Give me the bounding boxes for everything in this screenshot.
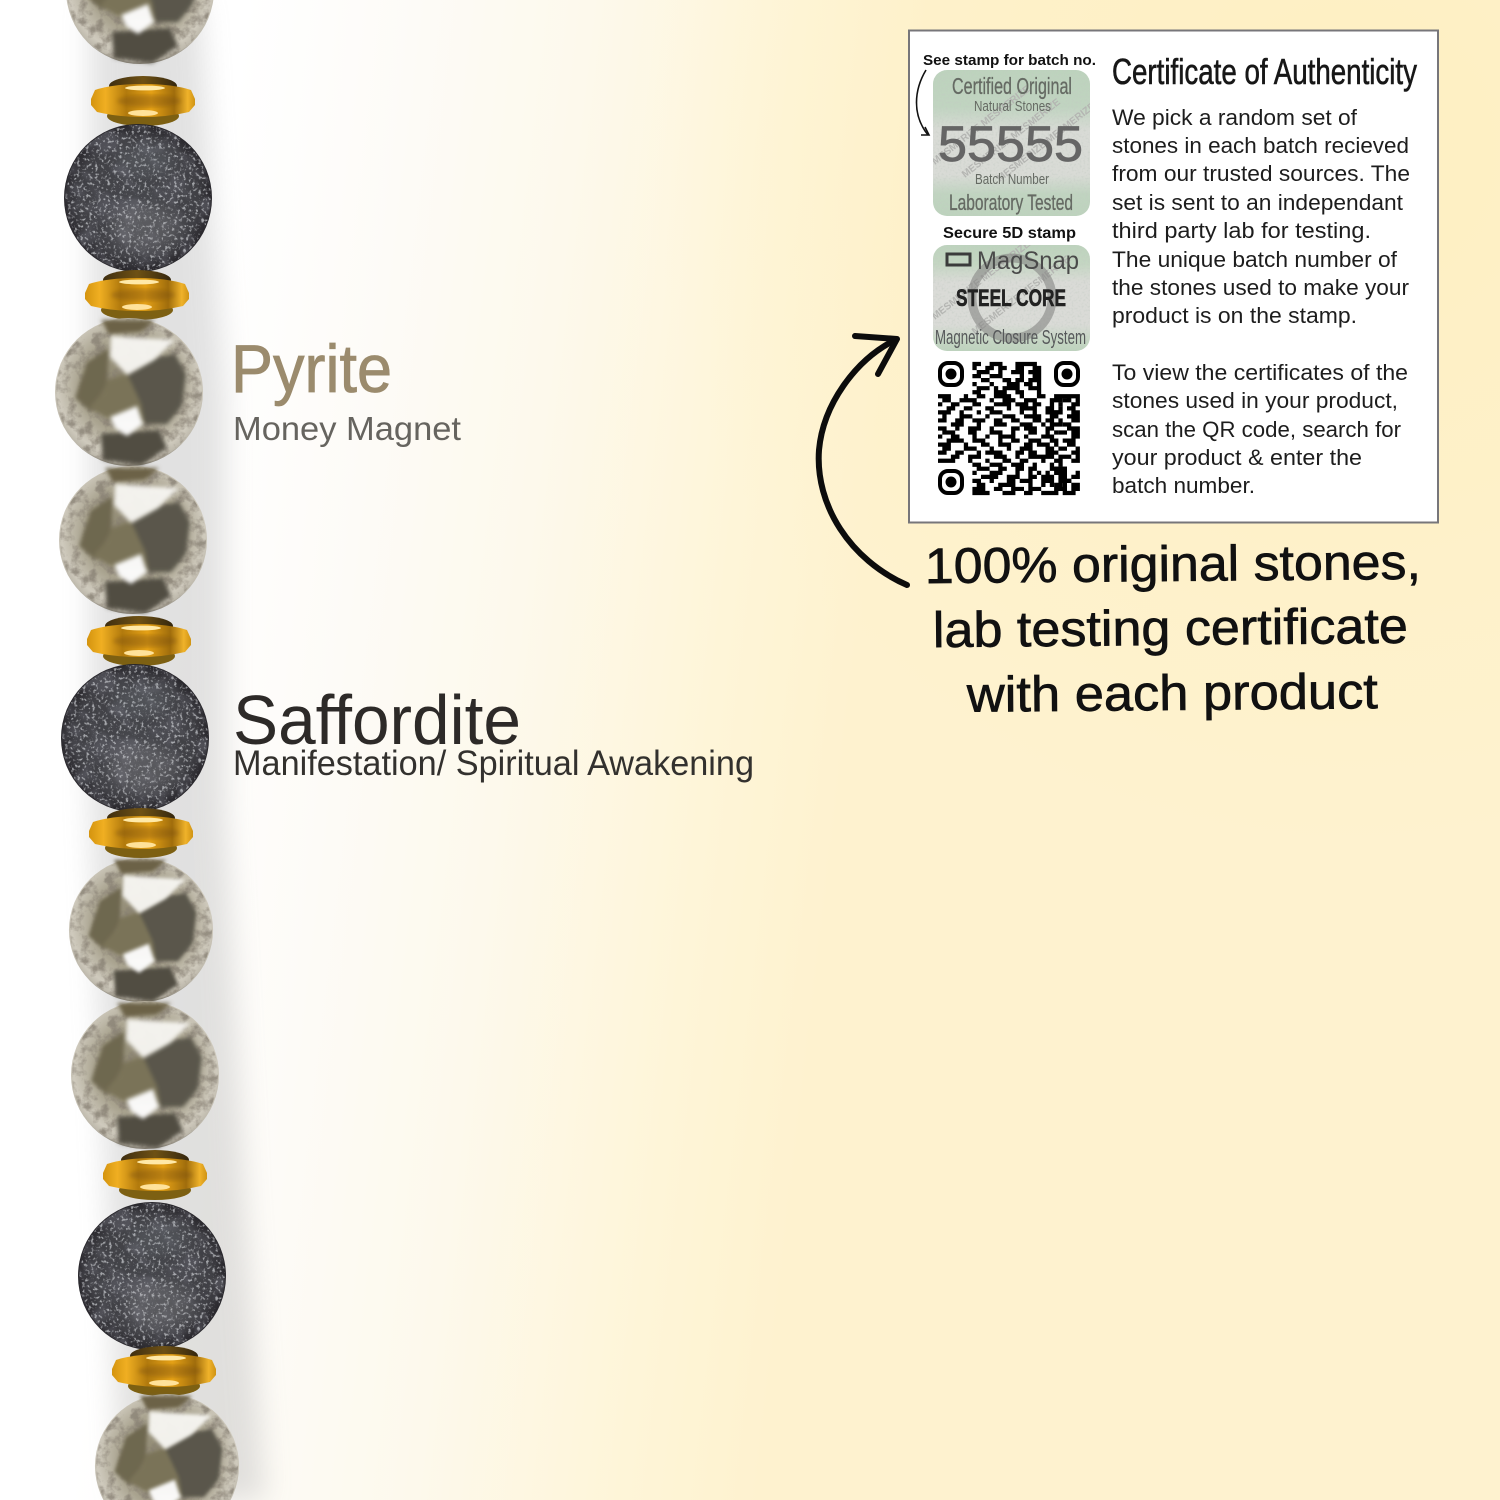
curved arrow to certificate — [819, 336, 907, 585]
batch stamp: 55555 — [938, 116, 1083, 172]
label: pyrite — [231, 331, 461, 447]
pyrite bead 4 — [69, 858, 213, 1002]
secure 5D stamp: MagSnap — [977, 247, 1079, 275]
certificate paragraph 1: product is on the stamp. — [1112, 303, 1357, 328]
label: saffordite: Manifestation/ Spiritual Awakening — [233, 744, 754, 783]
label: pyrite: Money Magnet — [233, 410, 461, 447]
secure 5D stamp: MESMERIZE MESMERIZE — [970, 254, 1073, 337]
batch stamp: MESMERIZE MESMERIZE — [995, 101, 1098, 184]
certificate paragraph 1: from our trusted sources. The — [1112, 161, 1410, 186]
QR code — [938, 363, 1080, 493]
stamp caption: See stamp for batch no. — [923, 53, 1096, 69]
certificate paragraph 2 — [1112, 360, 1408, 498]
certificate paragraph 2: stones used in your product, — [1112, 388, 1398, 413]
pyrite bead 5 — [71, 1001, 219, 1149]
certificate paragraph 1 — [1112, 105, 1410, 328]
saffordite bead 3 — [78, 1202, 226, 1350]
certificate paragraph 2: To view the certificates of the — [1112, 360, 1408, 385]
batch stamp: Certified Original — [952, 73, 1072, 99]
callout text — [925, 534, 1421, 723]
certificate paragraph 2: scan the QR code, search for — [1112, 417, 1401, 442]
gold spacer 3 — [87, 616, 191, 666]
secure stamp caption: Secure 5D stamp — [943, 225, 1076, 242]
pyrite bead 1 — [66, 0, 214, 64]
certificate paragraph 2: batch number. — [1112, 473, 1255, 498]
batch stamp: Batch Number — [975, 171, 1049, 188]
certificate paragraph 1: stones in each batch recieved — [1112, 133, 1409, 158]
gold spacer 6 — [112, 1346, 216, 1396]
certificate paragraph 1: the stones used to make your — [1112, 275, 1409, 300]
certificate paragraph 1: third party lab for testing. — [1112, 218, 1371, 243]
secure 5D stamp — [930, 239, 1090, 351]
batch stamp: Natural Stones — [974, 98, 1051, 115]
saffordite bead 2 — [61, 664, 209, 812]
certificate card — [909, 30, 1438, 522]
gold spacer 1 — [91, 76, 195, 126]
gold spacer 5 — [103, 1150, 207, 1200]
batch stamp: MESMERIZE MESMERIZE — [930, 84, 1033, 167]
pyrite bead 3 — [59, 466, 207, 614]
bead shadow — [90, 0, 265, 1500]
secure 5D stamp: STEEL CORE — [956, 285, 1066, 312]
gold spacer 2 — [85, 270, 189, 320]
pyrite bead 2 — [55, 318, 203, 466]
label: pyrite: Pyrite — [231, 331, 392, 407]
certificate paragraph 1: We pick a random set of — [1112, 105, 1358, 130]
pyrite bead 6 — [95, 1394, 239, 1500]
batch stamp — [930, 70, 1098, 216]
callout text: with each product — [966, 663, 1378, 723]
bracelet beads — [55, 0, 239, 1500]
batch stamp: Laboratory Tested — [949, 190, 1073, 215]
batch stamp: MESMERIZE MESMERIZE — [960, 97, 1063, 180]
certificate paragraph 2: your product & enter the — [1112, 445, 1362, 470]
callout text: 100% original stones, — [925, 534, 1421, 594]
secure 5D stamp: MESMERIZE MESMERIZE — [930, 239, 1033, 322]
saffordite bead 1 — [64, 124, 212, 272]
certificate paragraph 1: set is sent to an independant — [1112, 190, 1403, 215]
secure 5D stamp: Magnetic Closure System — [935, 327, 1086, 349]
gold spacer 4 — [89, 808, 193, 858]
label: saffordite: Saffordite — [233, 681, 521, 759]
certificate paragraph 1: The unique batch number of — [1112, 247, 1398, 272]
callout text: lab testing certificate — [933, 598, 1408, 658]
label: saffordite — [233, 681, 754, 783]
small arrow to batch number — [916, 70, 929, 135]
certificate title: Certificate of Authenticity — [1112, 51, 1417, 92]
